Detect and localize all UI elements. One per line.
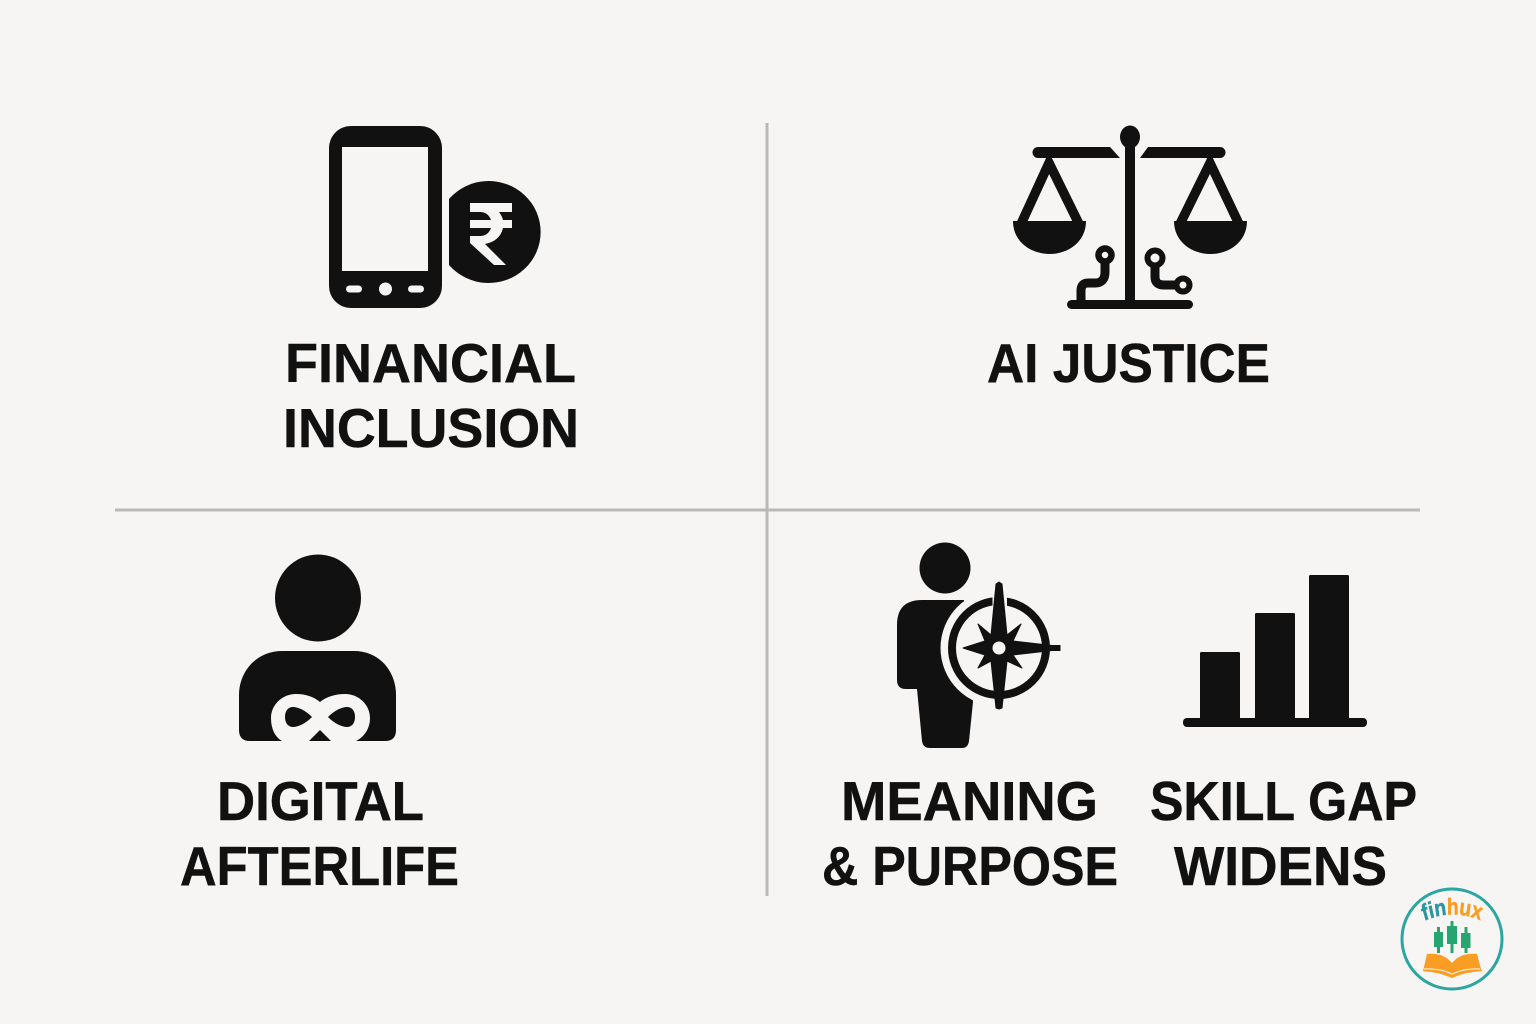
- heading: AI justice: AI JUSTICE: [987, 333, 1270, 394]
- panel: financial inclusion: [283, 126, 579, 459]
- heading: meaning and purpose: [822, 771, 1118, 897]
- heading: skill gap widens: SKILL GAP: [1150, 771, 1417, 832]
- panel: AI justice: [987, 126, 1270, 394]
- icon: smartphone: [329, 126, 442, 308]
- heading: digital afterlife: [180, 771, 459, 897]
- heading: digital afterlife: DIGITAL: [217, 771, 424, 832]
- panel: digital afterlife: [180, 554, 459, 897]
- heading: meaning and purpose: MEANING: [841, 771, 1098, 832]
- icon: rising bar chart: [1183, 575, 1367, 727]
- logo wordmark: finhux: [1420, 898, 1484, 921]
- icon: person with compass: [897, 542, 1060, 748]
- panel: skill gap widens: [1150, 575, 1417, 897]
- heading: skill gap widens: [1150, 771, 1417, 897]
- heading: skill gap widens: WIDENS: [1174, 836, 1387, 897]
- logo candlesticks: [1434, 921, 1470, 953]
- heading: financial inclusion: INCLUSION: [283, 398, 579, 459]
- heading: financial inclusion: FINANCIAL: [285, 333, 576, 394]
- icon: person with infinity symbol: [239, 554, 396, 741]
- heading: digital afterlife: AFTERLIFE: [180, 836, 459, 897]
- panel: meaning and purpose: [822, 542, 1118, 897]
- heading: meaning and purpose: & PURPOSE: [822, 836, 1118, 897]
- icon: scales with circuit traces: [1013, 126, 1247, 309]
- logo: finhux badge: [1400, 888, 1504, 990]
- icon: rupee coin: [449, 181, 541, 283]
- heading: financial inclusion: [283, 333, 579, 459]
- logo open book: [1423, 954, 1482, 978]
